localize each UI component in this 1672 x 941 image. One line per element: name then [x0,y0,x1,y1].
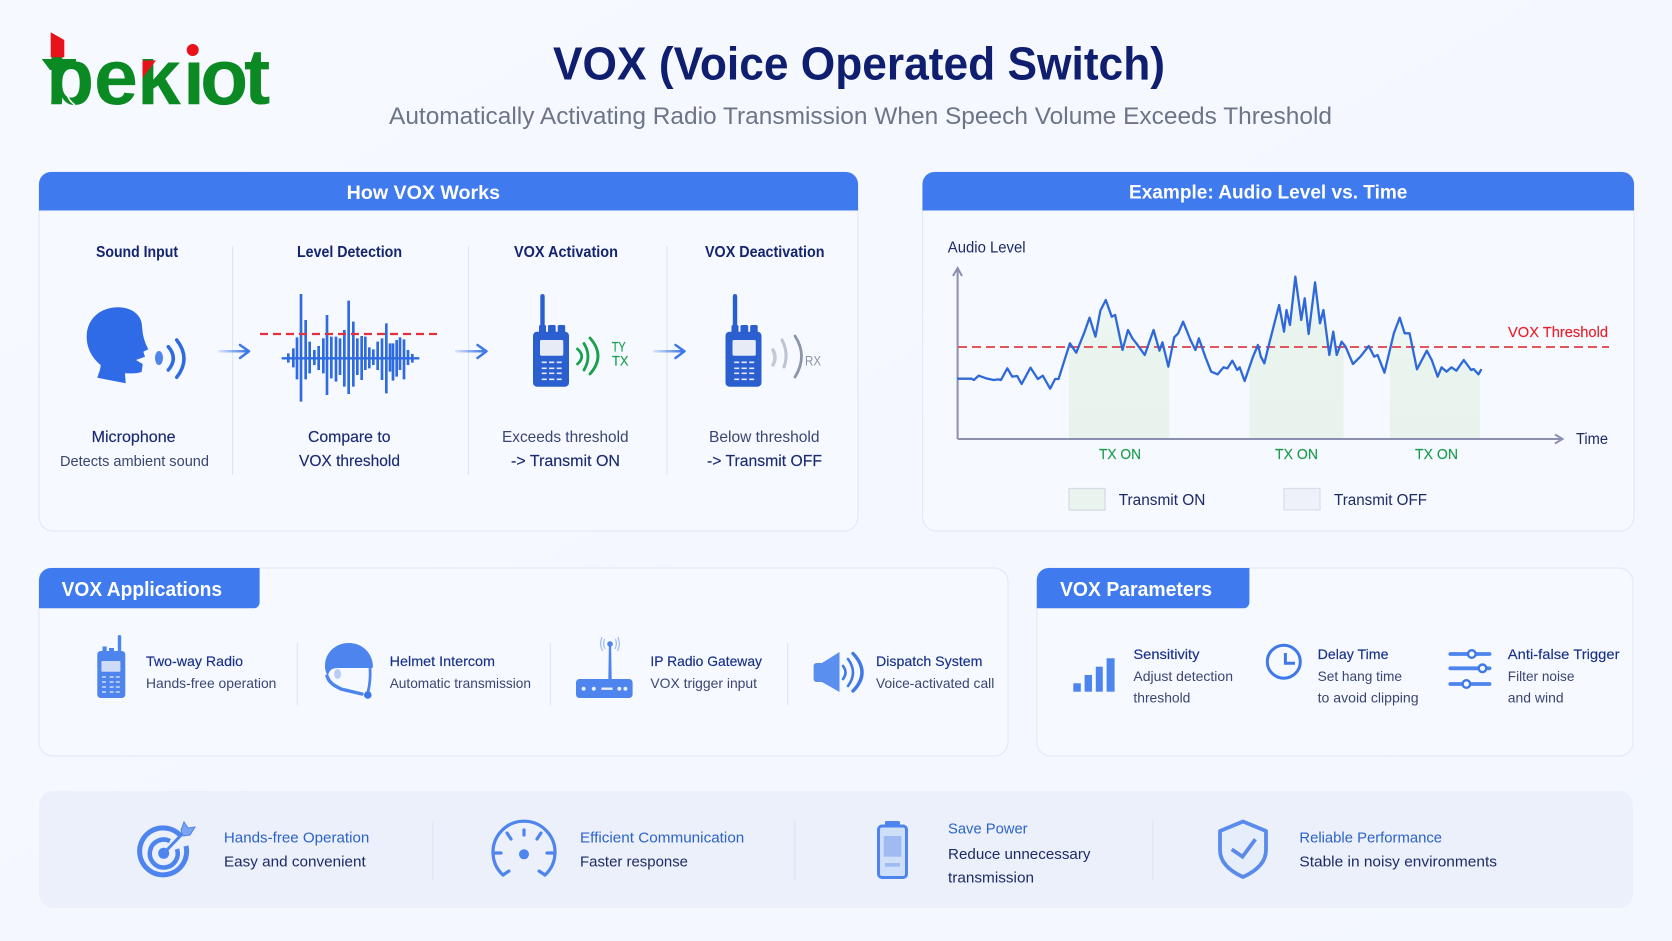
benefit: Save Power [878,820,1091,887]
arrow: level detection to activation [455,345,486,358]
panel: How VOX Works [39,172,858,531]
TX ON labels: TX ON [1275,447,1318,463]
item: IP Radio Gateway: VOX trigger input [650,675,757,691]
item: Dispatch System: Dispatch System [876,653,982,669]
icon: radio idle [726,294,822,387]
benefit: Hands-free Operation: Easy and convenient [224,854,367,871]
axis label: Time: Time [1576,431,1608,448]
icon: waveform with threshold [260,294,440,402]
step: VOX Deactivation: VOX Deactivation [705,244,824,261]
benefit: Efficient Communication [493,821,744,875]
benefit: Hands-free Operation: Hands-free Operation [224,830,369,847]
benefit: Save Power: transmission [948,870,1034,887]
benefit: Save Power: Reduce unnecessary [948,846,1091,863]
title: VOX (Voice Operated Switch) [553,38,1165,90]
icon: clock [1267,645,1300,678]
icon: helmet [325,643,373,699]
item: Helmet Intercom: Helmet Intercom [390,653,495,669]
item: IP Radio Gateway [576,637,762,698]
TX ON labels: TX ON [1415,447,1458,463]
parameter: Sensitivity: Sensitivity [1133,646,1200,662]
icon: router [576,637,633,698]
tab: VOX Applications: VOX Applications [62,579,222,601]
parameter: Sensitivity: threshold [1133,690,1190,706]
icon: shield [1220,822,1266,877]
panel header: Example: Example: Audio Level vs. Time [1129,182,1408,204]
step: Level Detection: Level Detection [297,244,402,261]
parameter: Delay Time: to avoid clipping [1318,690,1419,706]
chart: audio level over time [948,240,1609,463]
panel header: Example [922,172,1634,210]
benefit: Reliable Performance: Reliable Performance [1299,830,1442,847]
item: Dispatch System: Voice-activated call [876,675,994,691]
step: Sound Input [60,244,209,470]
item: Helmet Intercom [325,643,531,699]
tab: VOX Parameters [1037,568,1249,608]
step: VOX Activation [502,244,629,470]
item: IP Radio Gateway: IP Radio Gateway [650,653,762,669]
panel: benefits band [39,791,1633,908]
benefit: Efficient Communication: Faster response [580,854,688,871]
parameter: Anti-false Trigger [1450,646,1620,706]
item: Two-way Radio [97,635,276,698]
threshold line [958,346,1609,348]
tab: VOX Applications [39,568,260,608]
icon: radio idle: RX [805,352,822,368]
panel header: How VOX Works: How VOX Works [347,182,500,204]
arrow: activation to deactivation [653,345,684,358]
icon: target [140,822,195,875]
parameter: Anti-false Trigger: Anti-false Trigger [1508,646,1620,662]
panel: VOX Parameters [1037,568,1633,756]
icon: signal bars [1073,658,1115,692]
benefit: Reliable Performance [1220,822,1497,877]
icon: radio [97,635,125,698]
benefit: Reliable Performance: Stable in noisy environments [1299,854,1497,871]
icon: speedometer [493,821,555,875]
icon: sliders [1450,650,1490,688]
item: Dispatch System [814,652,994,692]
benefit: Hands-free Operation [140,822,369,875]
logo: bekiot: bekiot [46,32,270,121]
step: VOX Activation: -> Transmit ON [511,453,620,470]
parameter: Delay Time: Delay Time [1318,646,1389,662]
item: Two-way Radio: Hands-free operation [146,675,276,691]
TX ON labels: TX ON [1099,447,1141,463]
icon: radio transmitting [533,294,629,387]
icon: radio transmitting: TX [612,352,629,368]
panel: VOX Applications [39,568,1008,756]
item: Helmet Intercom: Automatic transmission [390,675,531,691]
parameter: Anti-false Trigger: Filter noise [1508,668,1575,684]
benefit: Save Power: Save Power [948,820,1028,837]
parameter: Anti-false Trigger: and wind [1508,690,1564,706]
step: Sound Input: Detects ambient sound [60,454,209,470]
tab: VOX Parameters: VOX Parameters [1060,579,1212,601]
step: VOX Activation: Exceeds threshold [502,429,629,446]
parameter: Delay Time [1267,645,1419,706]
icon: speaking head [87,307,184,383]
parameter: Delay Time: Set hang time [1318,668,1402,684]
icon: radio transmitting: TY [612,339,626,355]
TX ON labels [1099,447,1458,463]
axis label: Audio Level: Audio Level [948,240,1026,257]
step: Sound Input: Sound Input [96,244,178,261]
panel header: How VOX Works [39,172,858,210]
step: VOX Deactivation: Below threshold [709,429,820,446]
parameter: Sensitivity: Adjust detection [1133,668,1233,684]
step: VOX Activation: VOX Activation [514,244,618,261]
axes [953,268,1562,444]
step: VOX Deactivation [705,244,824,470]
step: Sound Input: Microphone [92,429,176,446]
transmit on regions [1069,277,1480,439]
step: Level Detection: VOX threshold [299,453,400,470]
legend: Transmit ON [1119,492,1205,509]
benefit: Efficient Communication: Efficient Communication [580,830,744,847]
legend: Transmit OFF [1334,492,1427,509]
arrow: sound input to level detection [218,345,249,358]
item: Two-way Radio: Two-way Radio [146,653,243,669]
parameter: Sensitivity [1073,646,1233,706]
threshold label: VOX Threshold [1508,324,1608,341]
step: VOX Deactivation: -> Transmit OFF [707,453,822,470]
subtitle: Automatically Activating Radio Transmission When Speech Volume Exceeds Threshold [389,103,1332,130]
panel: Example Audio Level vs. Time [922,172,1634,531]
icon: speaker [814,652,862,692]
step: Level Detection: Compare to [308,429,391,446]
legend [1069,488,1427,510]
step: Level Detection [260,244,440,470]
audio curve [958,277,1481,389]
icon: battery [878,821,906,878]
